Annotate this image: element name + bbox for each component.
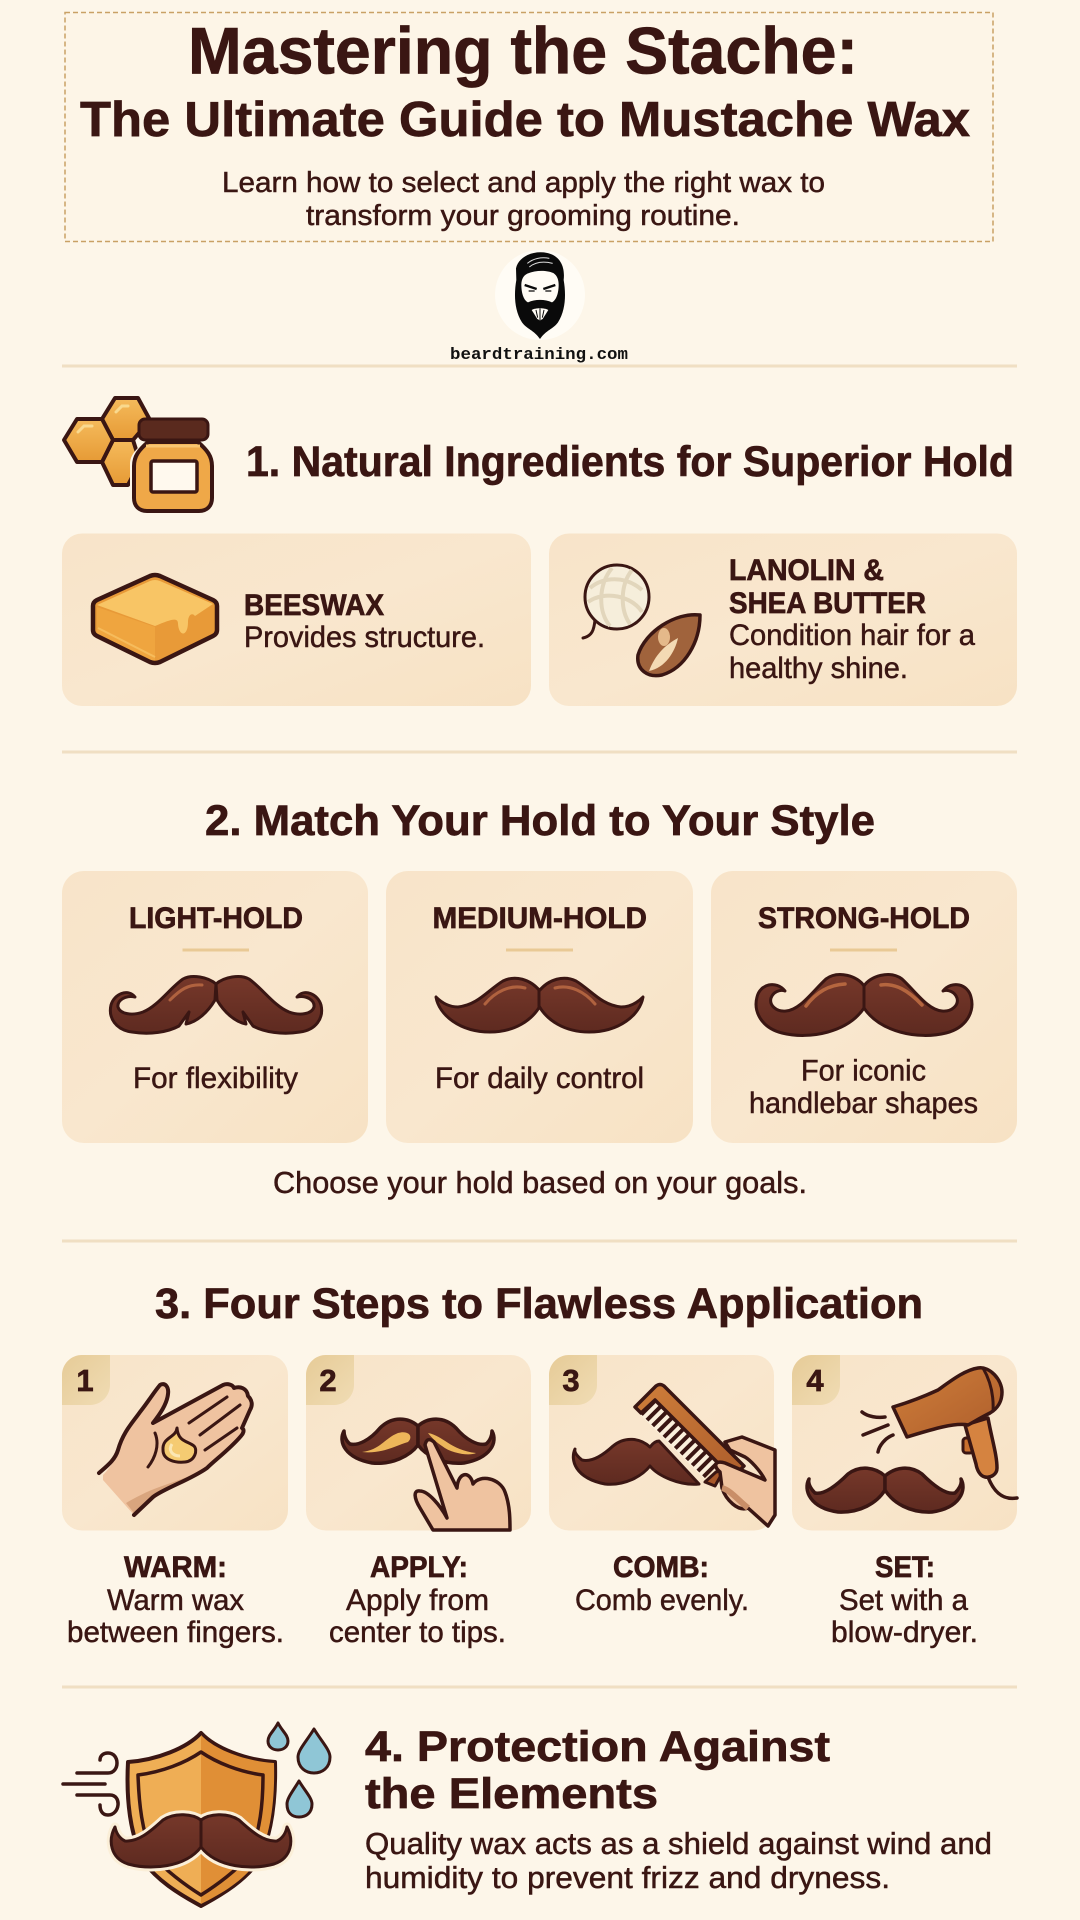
step 2 badge: 2 xyxy=(319,1363,337,1398)
card: strong hold xyxy=(711,871,1017,1143)
icon: water drops xyxy=(268,1723,330,1817)
card: light hold: LIGHT-HOLD xyxy=(129,902,303,935)
section 1: natural ingredients xyxy=(62,398,1017,706)
icon: light hold mustache xyxy=(110,977,322,1033)
section 4 description: Quality wax acts as a shield against wind and xyxy=(365,1826,992,1861)
step 3 text: COMB: xyxy=(613,1551,709,1584)
step 4: set xyxy=(792,1355,1017,1649)
lanolin description: Condition hair for a xyxy=(729,619,975,652)
step 3: comb xyxy=(549,1355,775,1617)
main title: Mastering the Stache: xyxy=(188,14,858,88)
step 4 text: Set with a xyxy=(839,1584,968,1617)
section 2: hold styles xyxy=(62,797,1017,1200)
step 4 badge xyxy=(792,1355,840,1405)
icon: strong hold mustache xyxy=(756,975,972,1035)
intro text: transform your grooming routine. xyxy=(306,200,740,232)
subtitle heading: The Ultimate Guide to Mustache Wax xyxy=(80,93,970,147)
step 1 text xyxy=(67,1551,284,1649)
step 2: apply xyxy=(306,1355,531,1649)
icon: hand with wax xyxy=(99,1384,252,1515)
card: light hold xyxy=(62,871,368,1143)
logo: bearded man xyxy=(450,250,628,365)
step 1 badge: 1 xyxy=(76,1363,94,1398)
icon: beeswax block xyxy=(93,575,217,663)
icon: mustache and finger xyxy=(342,1419,510,1530)
section 4 heading xyxy=(365,1723,830,1818)
lanolin description xyxy=(729,619,975,685)
icon: wool ball xyxy=(583,565,649,638)
section 4 description: humidity to prevent frizz and dryness. xyxy=(365,1860,890,1895)
card: medium hold: For daily control xyxy=(435,1062,644,1095)
card: strong hold: STRONG-HOLD xyxy=(758,902,970,935)
step 2 badge xyxy=(306,1355,354,1405)
step 4 badge: 4 xyxy=(806,1363,824,1398)
section 1 heading: 1. Natural Ingredients for Superior Hold xyxy=(246,438,1014,486)
section 4 heading: 4. Protection Against xyxy=(365,1723,830,1771)
section 4 heading: the Elements xyxy=(365,1770,658,1818)
lanolin label xyxy=(729,554,926,620)
icon: honeycomb and jar xyxy=(64,398,216,515)
card: lanolin and shea butter xyxy=(549,534,1017,706)
step 4 text: SET: xyxy=(875,1551,935,1584)
step 1 text: between fingers. xyxy=(67,1616,284,1649)
section 4 description xyxy=(365,1826,992,1895)
logo url: beardtraining.com xyxy=(450,346,628,365)
step 3 text xyxy=(575,1551,749,1617)
icon: shea nut xyxy=(638,615,700,676)
step 3 badge xyxy=(549,1355,597,1405)
section 4: protection xyxy=(63,1723,992,1906)
step 1: warm xyxy=(62,1355,288,1649)
icon: comb and mustache xyxy=(573,1384,775,1526)
step 1 text: Warm wax xyxy=(107,1584,244,1617)
icon: medium hold mustache xyxy=(436,978,643,1032)
step 2 text xyxy=(329,1551,506,1649)
beeswax label: BEESWAX xyxy=(244,589,384,622)
lanolin description: healthy shine. xyxy=(729,652,908,685)
section 3: four application steps xyxy=(62,1280,1017,1649)
step 2 text: APPLY: xyxy=(370,1551,468,1584)
step 2 text: center to tips. xyxy=(329,1616,506,1649)
card: medium hold xyxy=(386,871,693,1143)
card: strong hold: handlebar shapes xyxy=(749,1087,978,1120)
step 4 text xyxy=(831,1551,978,1649)
lanolin label: SHEA BUTTER xyxy=(729,587,926,620)
icon: shield xyxy=(128,1733,275,1906)
icon: mustache xyxy=(111,1815,291,1867)
intro text: Learn how to select and apply the right wax to xyxy=(222,167,825,199)
title block xyxy=(65,12,993,242)
card: medium hold: MEDIUM-HOLD xyxy=(432,902,647,935)
step 3 badge: 3 xyxy=(562,1363,580,1398)
intro text xyxy=(222,167,825,232)
step 1 text: WARM: xyxy=(124,1551,227,1584)
hold caption: Choose your hold based on your goals. xyxy=(273,1166,807,1200)
beeswax description: Provides structure. xyxy=(244,621,485,654)
step 3 text: Comb evenly. xyxy=(575,1584,749,1617)
icon: blow dryer and mustache xyxy=(807,1368,1017,1512)
icon: shield, mustache, wind and water drops xyxy=(63,1723,330,1906)
lanolin label: LANOLIN & xyxy=(729,554,884,587)
section 3 heading: 3. Four Steps to Flawless Application xyxy=(155,1280,923,1328)
step 2 text: Apply from xyxy=(346,1584,489,1617)
icon: wind xyxy=(63,1753,118,1815)
step 4 text: blow-dryer. xyxy=(831,1616,978,1649)
card: beeswax xyxy=(62,534,531,706)
card: strong hold: For iconic xyxy=(801,1054,926,1088)
step 1 badge xyxy=(62,1355,110,1405)
card: light hold: For flexibility xyxy=(133,1062,298,1095)
section 2 heading: 2. Match Your Hold to Your Style xyxy=(205,797,875,845)
